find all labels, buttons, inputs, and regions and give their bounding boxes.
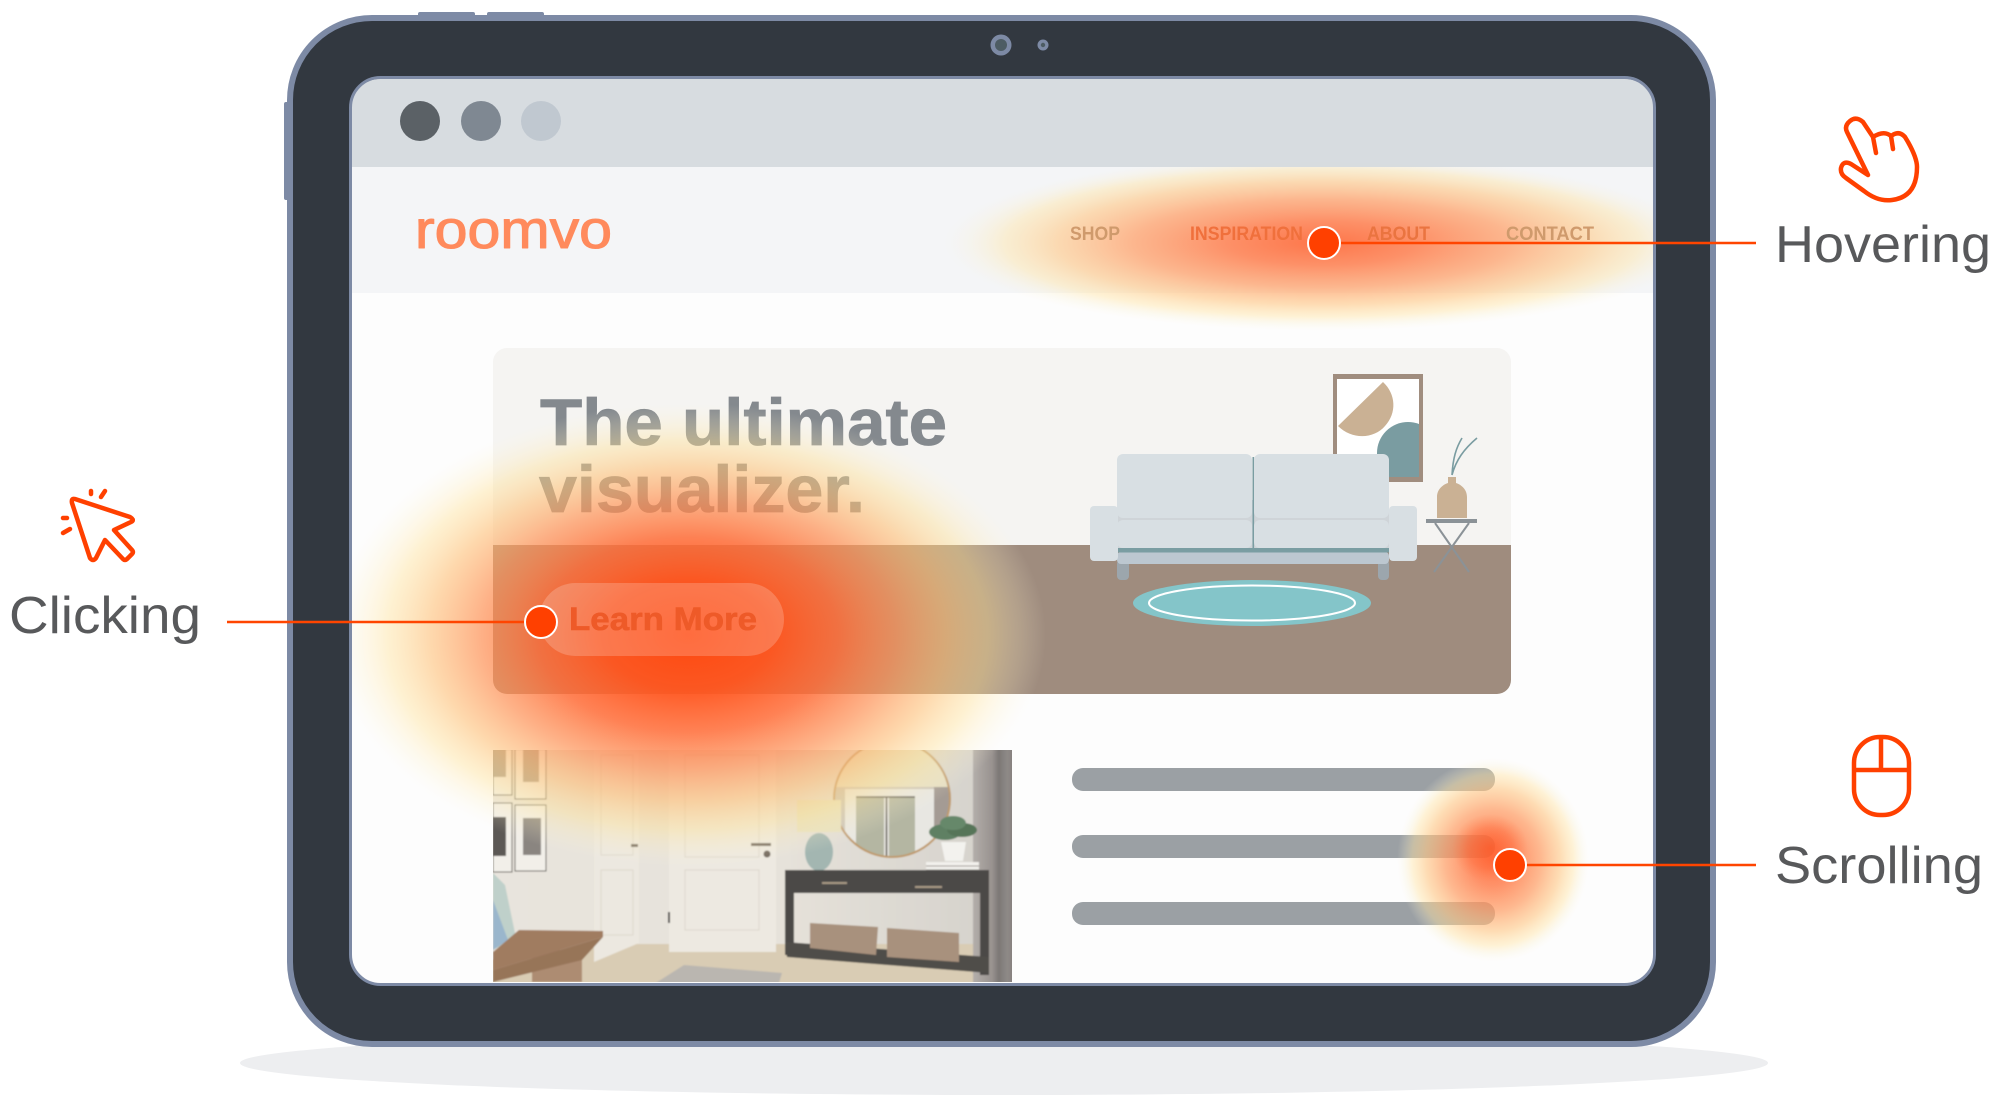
front camera — [990, 34, 1048, 56]
navigation links: SHOP — [1070, 224, 1120, 245]
screen border — [350, 78, 1654, 984]
woven baskets — [810, 923, 959, 962]
side table with vase — [1426, 438, 1477, 572]
label: Scrolling — [1775, 837, 1983, 895]
leader line — [1324, 242, 1756, 244]
icon: mouse — [1854, 737, 1909, 815]
navigation links: INSPIRATION — [1190, 224, 1303, 245]
navigation links: ABOUT — [1367, 224, 1430, 245]
page background — [351, 79, 1654, 984]
window dots — [400, 101, 561, 141]
marker — [1308, 227, 1340, 259]
lamp — [797, 800, 841, 871]
round mirror — [834, 741, 954, 859]
potted plant — [929, 816, 977, 861]
marker — [525, 606, 557, 638]
sofa — [1090, 454, 1417, 580]
tablet body — [284, 12, 1713, 1044]
callout: hovering — [1308, 119, 1991, 274]
callout: clicking — [9, 491, 557, 645]
navigation links: CONTACT — [1506, 224, 1594, 245]
books — [926, 861, 980, 871]
label: Hovering — [1775, 216, 1991, 274]
ground shadow — [240, 1031, 1768, 1095]
curtain — [972, 750, 1012, 982]
callout: scrolling — [1494, 737, 1983, 895]
heat: scrolling — [1400, 764, 1584, 956]
screen — [330, 79, 1700, 986]
leader line — [227, 621, 541, 623]
heat: hovering — [968, 167, 1653, 326]
learn more button — [539, 583, 784, 656]
label: Clicking — [9, 587, 201, 645]
top and side hardware buttons — [284, 12, 544, 200]
icon: cursor — [63, 491, 133, 560]
room photo — [490, 741, 1016, 986]
marker — [1494, 849, 1526, 881]
picture frames — [493, 749, 546, 872]
browser chrome — [351, 79, 1654, 167]
text placeholder bars — [1072, 768, 1495, 925]
hero headline: visualizer. — [539, 452, 865, 526]
heat: scrolling hot core — [1460, 818, 1522, 874]
icon: pointing hand — [1841, 119, 1917, 200]
navigation bar — [351, 167, 1654, 293]
navigation links — [1070, 226, 1594, 240]
leader line — [1510, 864, 1756, 866]
hero headline — [538, 396, 946, 513]
hero banner — [493, 348, 1511, 694]
floor mat — [657, 964, 782, 982]
bench and cushion — [493, 873, 603, 982]
wall art — [1333, 374, 1423, 482]
photo wall — [493, 750, 974, 952]
learn more button: Learn More — [569, 601, 757, 637]
hero headline: The ultimate — [540, 385, 947, 459]
rug — [1133, 580, 1371, 626]
hero floor — [493, 545, 1511, 694]
photo floor — [493, 944, 974, 982]
hero wall — [493, 348, 1511, 545]
console table — [785, 870, 989, 975]
logo: roomvo — [415, 200, 612, 260]
doors — [593, 842, 776, 962]
tablet bezel — [290, 18, 1713, 1044]
heat: clicking — [330, 403, 1046, 867]
